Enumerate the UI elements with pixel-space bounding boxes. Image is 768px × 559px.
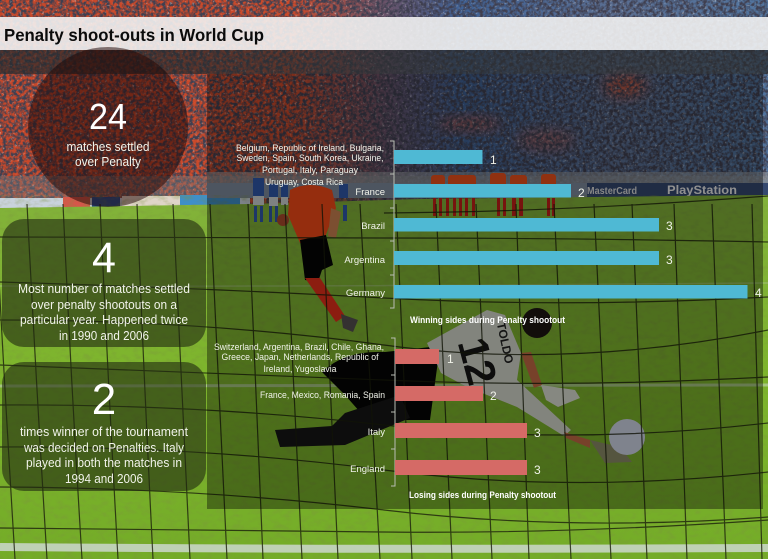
winning category labels: Argentina <box>344 255 386 266</box>
shirt name: TOLDO <box>494 321 516 365</box>
losing axis <box>391 338 395 486</box>
advertising boards <box>0 172 768 209</box>
losing values: 2 <box>490 389 497 403</box>
losing category labels: Switzerland, Argentina, Brazil, Chile, Ghana, <box>214 342 384 353</box>
stat circle: 24 matches <box>28 47 188 207</box>
winning category labels: Portugal, Italy, Paraguay <box>262 165 358 176</box>
chart backdrop panel <box>207 74 763 509</box>
board lettering: MasterCard <box>587 185 637 197</box>
advertising boards: PlayStation <box>667 183 737 197</box>
stat panel: 2 finals: was decided on Penalties. Italy <box>23 440 184 455</box>
title: Penalty shoot-outs in World Cup <box>4 25 264 45</box>
bar chart: losing sides <box>214 338 557 501</box>
winning category labels: Sweden, Spain, South Korea, Ukraine, <box>236 153 384 164</box>
winning bars <box>394 150 748 298</box>
lower stand rail <box>0 176 768 198</box>
winning category labels <box>236 143 386 299</box>
winning values: 3 <box>666 219 673 233</box>
winning values: 3 <box>666 253 673 267</box>
losing values: 1 <box>447 352 454 366</box>
shirt number: 12 <box>449 332 506 390</box>
crowd stands <box>0 0 768 205</box>
losing values: 3 <box>534 463 541 477</box>
waiting players <box>253 173 556 222</box>
stat panel: 2 finals: 1994 and 2006 <box>65 471 143 486</box>
winning category labels: Belgium, Republic of Ireland, Bulgaria, <box>236 143 384 154</box>
kicker in orange <box>277 185 358 332</box>
losing category labels: Ireland, Yugoslavia <box>264 364 337 375</box>
losing category labels: Italy <box>368 427 385 438</box>
losing category labels: France, Mexico, Romania, Spain <box>260 390 385 401</box>
stat circle: 24 matches: over Penalty <box>75 154 141 169</box>
stat panel: 4 matches: over penalty shootouts on a <box>31 297 178 312</box>
winning values: 2 <box>578 186 585 200</box>
losing category labels: England <box>350 464 385 475</box>
losing category labels: Greece, Japan, Netherlands, Republic of <box>222 352 379 363</box>
stat panel: 4 matches: in 1990 and 2006 <box>59 328 149 343</box>
bar chart: winning sides <box>236 141 762 326</box>
stat number 2: 2 <box>92 375 116 424</box>
stat description: times winner of the tournament <box>20 424 188 439</box>
winning category labels: Germany <box>346 288 385 299</box>
diving goalkeeper <box>275 308 645 463</box>
losing values <box>447 352 541 477</box>
losing values: 3 <box>534 426 541 440</box>
stat description: Most number of matches settled <box>18 281 190 296</box>
stat panel: 2 finals <box>2 362 206 491</box>
stat panel: 4 matches: particular year. Happened twice <box>20 312 188 327</box>
losing bars <box>395 349 527 475</box>
winning chart title: Winning sides during Penalty shootout <box>410 315 566 326</box>
winning category labels: France <box>355 187 385 198</box>
winning values: 1 <box>490 153 497 167</box>
winning category labels: Brazil <box>361 221 385 232</box>
losing category labels <box>214 342 385 475</box>
title banner <box>0 17 768 50</box>
stat caption: matches settled <box>66 139 150 154</box>
losing chart title: Losing sides during Penalty shootout <box>409 490 557 501</box>
stat number 24: 24 <box>89 96 127 137</box>
pitch <box>0 195 768 559</box>
stat number 4: 4 <box>92 234 116 282</box>
goal net <box>0 196 768 559</box>
stat panel: 4 matches <box>2 219 206 347</box>
winning values: 4 <box>755 286 762 300</box>
pitch lines <box>0 283 768 549</box>
winning values <box>490 153 762 300</box>
winning category labels: Uruguay, Costa Rica <box>265 177 344 188</box>
winning axis <box>390 141 394 308</box>
stat panel: 2 finals: played in both the matches in <box>26 455 182 470</box>
